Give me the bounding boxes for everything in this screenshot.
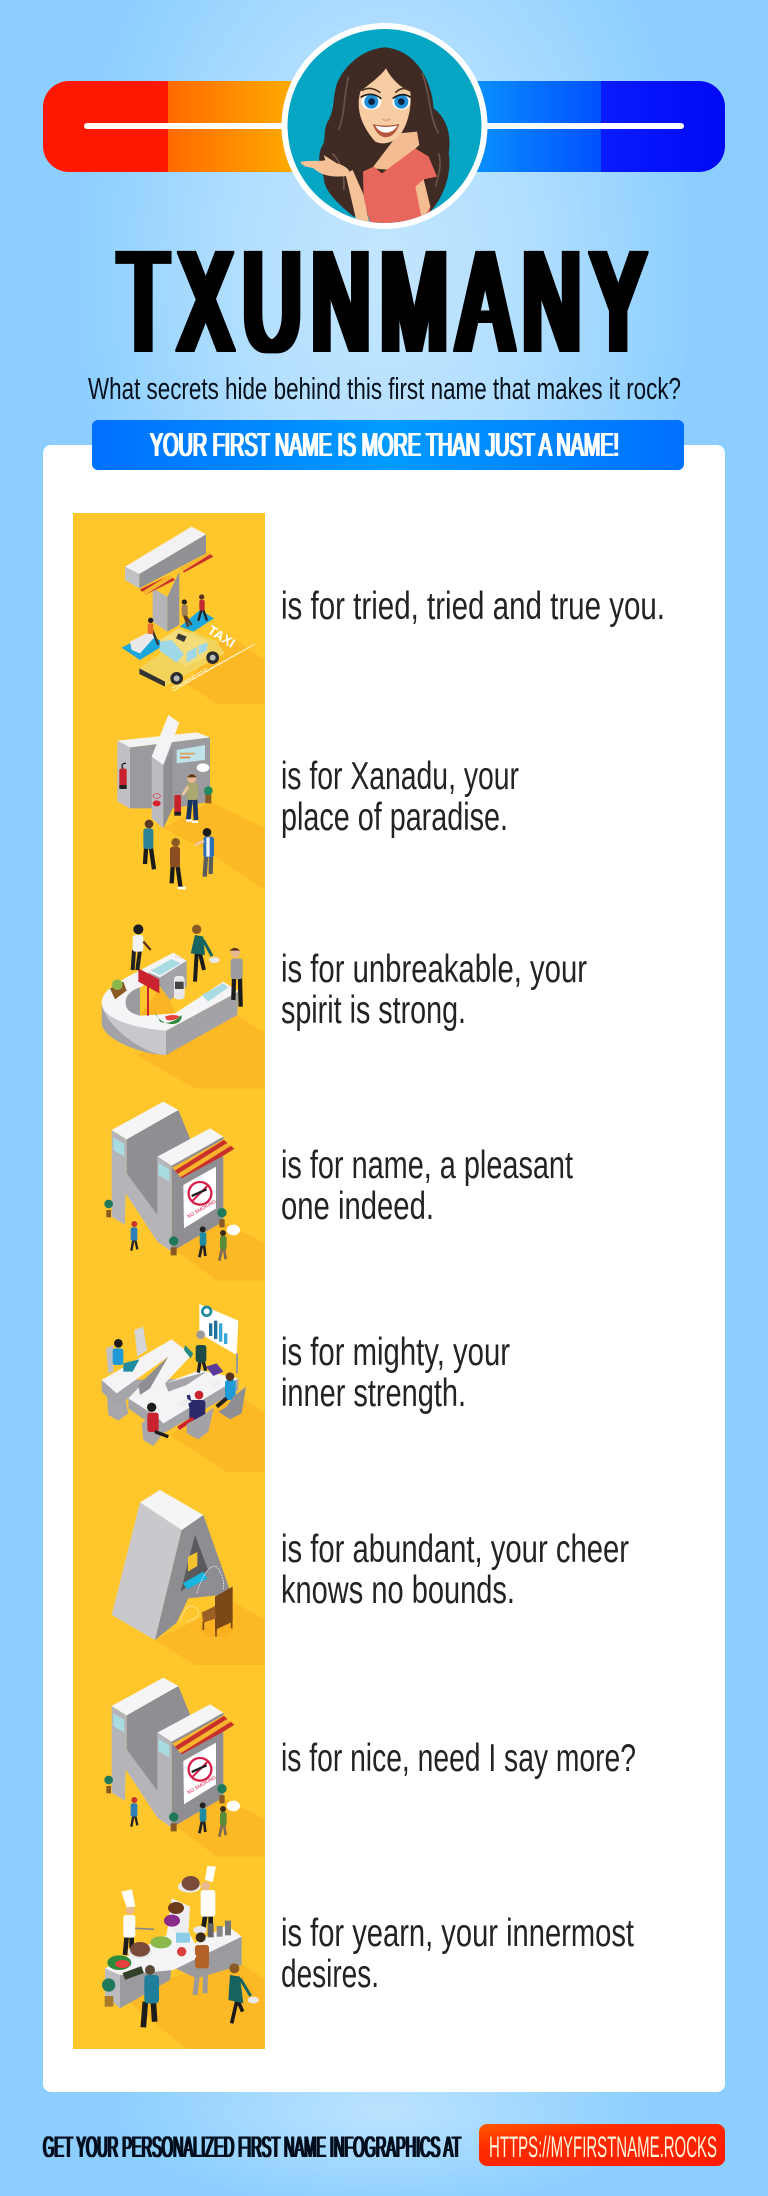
- white content panel: [43, 445, 725, 2092]
- illustration: U diner counter: [102, 924, 265, 1089]
- yellow image column: [73, 513, 265, 2049]
- illustration: A building with chair: [112, 1490, 265, 1665]
- row M: [102, 1304, 510, 1472]
- row N second: [104, 1678, 636, 1857]
- avatar portrait: [282, 23, 488, 229]
- title: TXUNMANY: [119, 221, 656, 382]
- label: X: is for Xanadu, your: [281, 755, 519, 798]
- banner: [92, 420, 684, 470]
- row X: [117, 715, 519, 890]
- label: U second line: spirit is strong.: [281, 989, 466, 1032]
- header colour bar: [43, 81, 725, 172]
- label: M: is for mighty, your: [281, 1331, 510, 1374]
- label: M second line: inner strength.: [281, 1372, 466, 1415]
- illustration: M meeting table: [102, 1304, 265, 1472]
- row N: [104, 1102, 573, 1281]
- label: N again: is for nice, need I say more?: [281, 1737, 636, 1780]
- label: Y second line: desires.: [281, 1953, 379, 1996]
- illustration: Y buffet with chefs: [102, 1866, 265, 2049]
- label: X second line: place of paradise.: [281, 796, 508, 839]
- illustration: N no smoking building again: [104, 1678, 265, 1857]
- label: N second line: one indeed.: [281, 1185, 434, 1228]
- row T: [73, 513, 665, 705]
- white line across the bar: [84, 123, 684, 129]
- illustration: X building with people: [117, 715, 265, 890]
- label: A second line: knows no bounds.: [281, 1569, 515, 1612]
- row Y: [102, 1866, 634, 2049]
- row U: [102, 924, 587, 1089]
- footer link button: [479, 2124, 725, 2166]
- label: U: is for unbreakable, your: [281, 948, 587, 991]
- row A: [112, 1490, 629, 1665]
- label: A: is for abundant, your cheer: [281, 1528, 629, 1571]
- illustration: N no smoking building: [104, 1102, 265, 1281]
- illustration: N no smoking building: NO SMOKING: [186, 1199, 217, 1220]
- illustration: T taxi stand: TAXI: [205, 622, 238, 651]
- label: Y: is for yearn, your innermost: [281, 1912, 634, 1955]
- label: N: is for name, a pleasant: [281, 1144, 573, 1187]
- illustration: T taxi stand: [73, 513, 265, 705]
- illustration: N no smoking building again: NO SMOKING: [186, 1775, 217, 1796]
